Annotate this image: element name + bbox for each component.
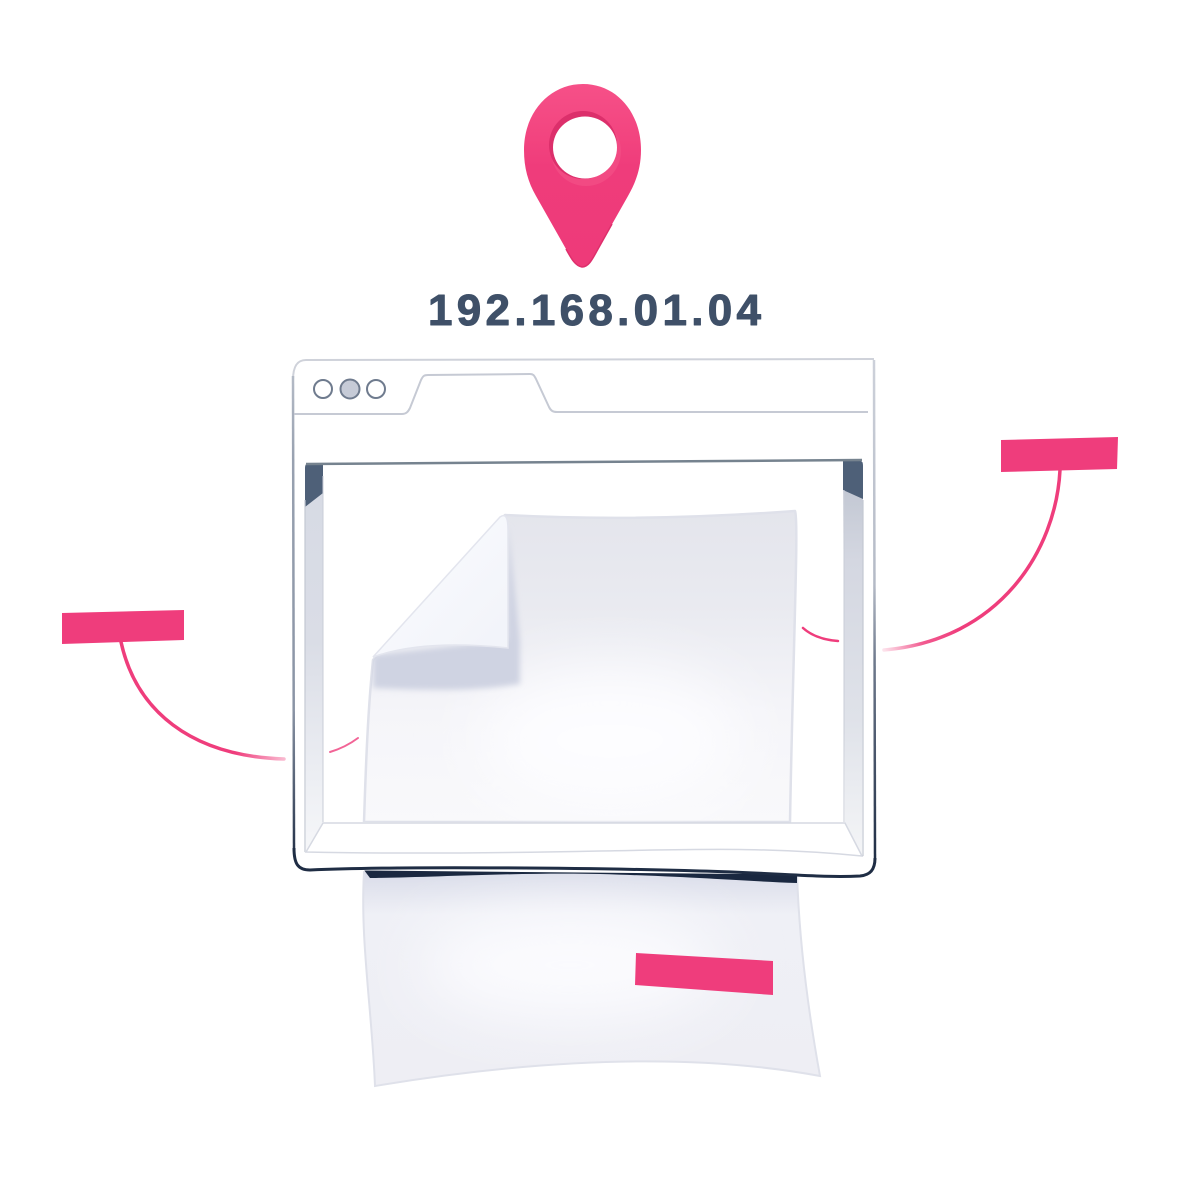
icon: location pin bbox=[524, 84, 641, 267]
top inner edge bbox=[306, 460, 862, 464]
callout: left label bbox=[62, 610, 358, 759]
right wall dark corner bbox=[843, 460, 863, 499]
window ledge bbox=[305, 822, 862, 856]
window bottom edge bbox=[294, 848, 875, 876]
illustration bbox=[62, 84, 1118, 1087]
callout: right label bbox=[803, 437, 1118, 650]
window left edge bbox=[293, 376, 294, 850]
curl shadow bbox=[372, 550, 522, 692]
browser window bbox=[293, 359, 875, 876]
paper page with curled corner bbox=[364, 511, 796, 822]
page body bbox=[364, 511, 796, 822]
browser tab line bbox=[294, 374, 868, 414]
IP address label: 192.168.01.04 bbox=[428, 286, 762, 335]
shadow under window bbox=[364, 870, 797, 883]
window frame bbox=[293, 359, 875, 875]
left wall dark corner bbox=[305, 463, 323, 507]
window controls bbox=[314, 380, 385, 398]
page highlight bbox=[566, 693, 654, 822]
curled corner bbox=[373, 516, 508, 657]
window right edge bbox=[874, 360, 875, 860]
lower paper sheet bbox=[363, 870, 820, 1086]
right inner wall bbox=[843, 462, 863, 856]
left inner wall bbox=[305, 470, 323, 852]
callout: paper label bbox=[635, 953, 773, 995]
